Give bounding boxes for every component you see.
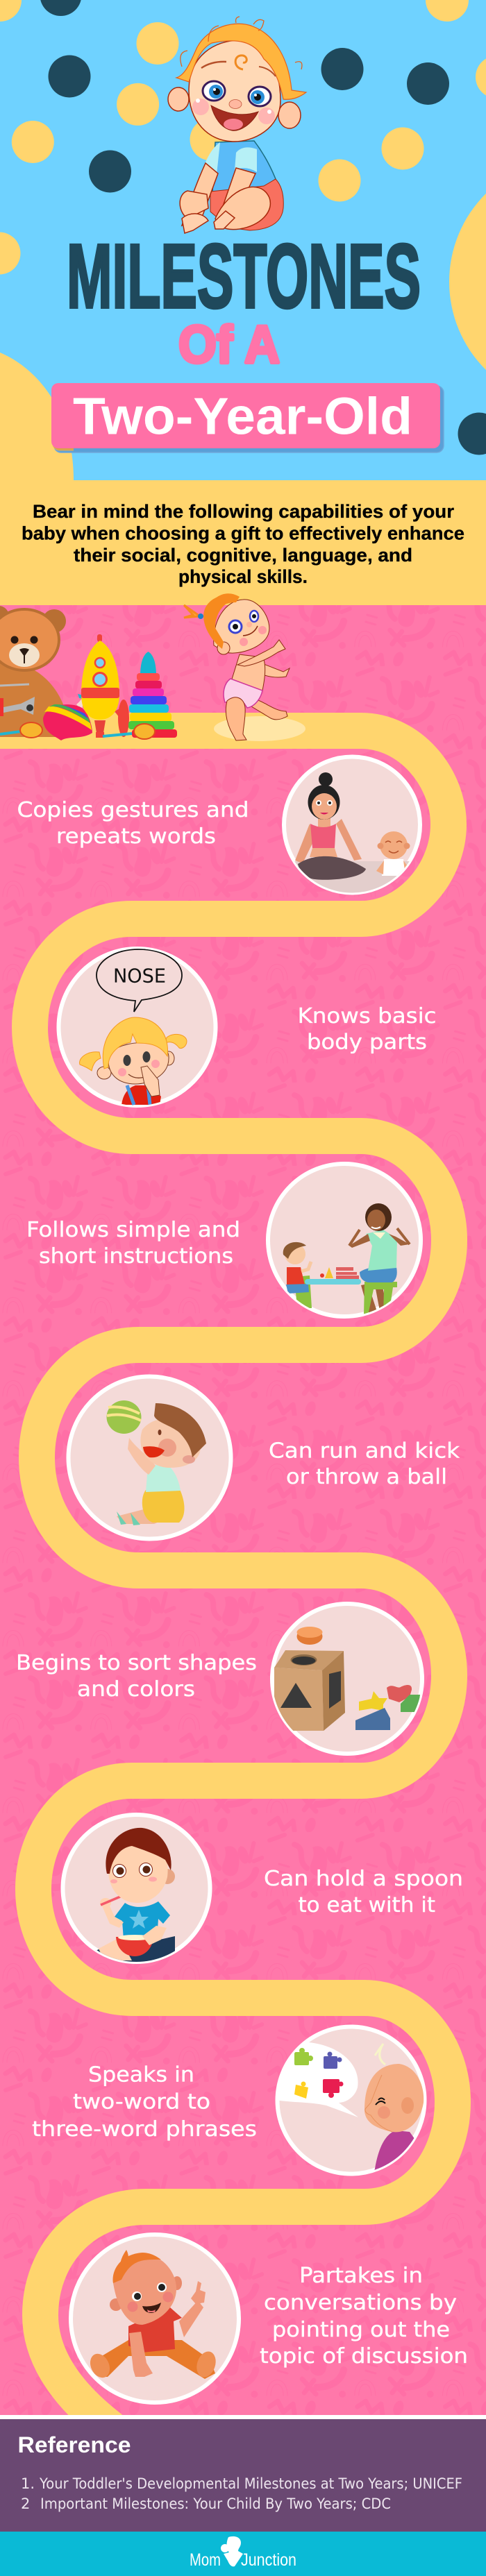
heading: Of A: Of A — [178, 315, 280, 375]
icon: walking baby — [184, 593, 305, 741]
illustration: baby talking with puzzle bubble — [264, 2026, 425, 2179]
panel: reference: Reference — [18, 2432, 131, 2457]
illustration: boy with ball — [68, 1377, 231, 1539]
illustration: baby pointing — [71, 2235, 239, 2403]
icon: sitting baby — [168, 17, 306, 233]
text: speaks in phrases: three-word phrases — [32, 2117, 257, 2142]
icon: maracas — [0, 722, 155, 739]
text: speaks in phrases — [32, 2062, 257, 2142]
panel: milestones background — [0, 605, 486, 2415]
text block: intro: physical skills. — [178, 566, 308, 587]
panel: reference: 1. — [21, 2475, 35, 2492]
text: follows instructions: Follows simple and — [26, 1218, 240, 1242]
text: knows basic body parts: body parts — [307, 1030, 427, 1055]
text block: intro: baby when choosing a gift to effectively enhance — [22, 523, 464, 544]
panel: reference — [0, 2419, 486, 2532]
illustration: girl pointing to nose — [58, 949, 215, 1105]
speech bubble with puzzle pieces — [279, 2042, 358, 2117]
illustration: teacher and child — [268, 1164, 421, 1322]
text: partakes in conversations — [260, 2264, 468, 2369]
ball — [107, 1400, 142, 1434]
text: sort shapes: Begins to sort shapes — [16, 1651, 257, 1675]
logo: MomJunction: Mom — [190, 2550, 221, 2570]
text: hold a spoon: to eat with it — [299, 1893, 435, 1917]
text: partakes in conversations: Partakes in — [299, 2264, 423, 2288]
text block: intro — [22, 501, 464, 587]
text: follows instructions — [26, 1218, 240, 1269]
text: sort shapes — [16, 1651, 257, 1702]
icon: stacking ring toy — [128, 652, 177, 738]
text: run and kick — [269, 1439, 460, 1489]
logo: MomJunction — [190, 2536, 296, 2570]
text: follows instructions: short instructions — [39, 1244, 233, 1269]
text: run and kick: or throw a ball — [286, 1465, 447, 1489]
divider band — [0, 2415, 486, 2419]
illustration: boy eating with spoon — [62, 1815, 210, 1964]
text: speaks in phrases: Speaks in — [88, 2062, 194, 2087]
text: hold a spoon: Can hold a spoon — [264, 1867, 463, 1891]
text: hold a spoon — [264, 1867, 463, 1917]
logo: MomJunction: Junction — [241, 2550, 296, 2570]
text block: intro: Bear in mind the following capabilities of your — [33, 501, 454, 522]
text: copies gestures: Copies gestures and — [17, 798, 249, 822]
panel: reference: Important Milestones: Your Child By Two Years; CDC — [40, 2496, 391, 2512]
text: partakes in conversations: pointing out the — [272, 2318, 450, 2342]
text: partakes in conversations: topic of discussion — [260, 2344, 468, 2369]
speech bubble: NOSE — [113, 965, 166, 987]
text: copies gestures: repeats words — [56, 824, 216, 849]
panel: footer logo band — [0, 2532, 486, 2576]
panel: intro band — [0, 480, 486, 605]
text block: intro: their social, cognitive, language, and — [74, 545, 412, 566]
illustration: shape sorter toy — [272, 1604, 422, 1754]
icon: spinning top — [43, 690, 92, 740]
text: knows basic body parts — [297, 1004, 436, 1055]
text: run and kick: Can run and kick — [269, 1439, 460, 1463]
icon: toy rocket — [81, 634, 129, 738]
heading badge: Two-Year-Old: Two-Year-Old — [73, 387, 412, 446]
illustration: mother and baby yoga — [282, 755, 422, 895]
text: knows basic body parts: Knows basic — [297, 1004, 436, 1028]
text: speaks in phrases: two-word to — [73, 2090, 210, 2114]
speech bubble — [97, 949, 182, 1012]
panel: reference: 2 — [21, 2496, 30, 2512]
panel: reference: Your Toddler's Developmental Milestones at Two Years; UNICEF — [39, 2475, 462, 2492]
text: partakes in conversations: conversations by — [264, 2291, 457, 2315]
icon: teddy bear — [0, 606, 68, 737]
text: sort shapes: and colors — [77, 1677, 195, 1702]
winding yellow path — [0, 731, 453, 2429]
panel: header background — [0, 0, 486, 480]
text: copies gestures — [17, 798, 249, 849]
